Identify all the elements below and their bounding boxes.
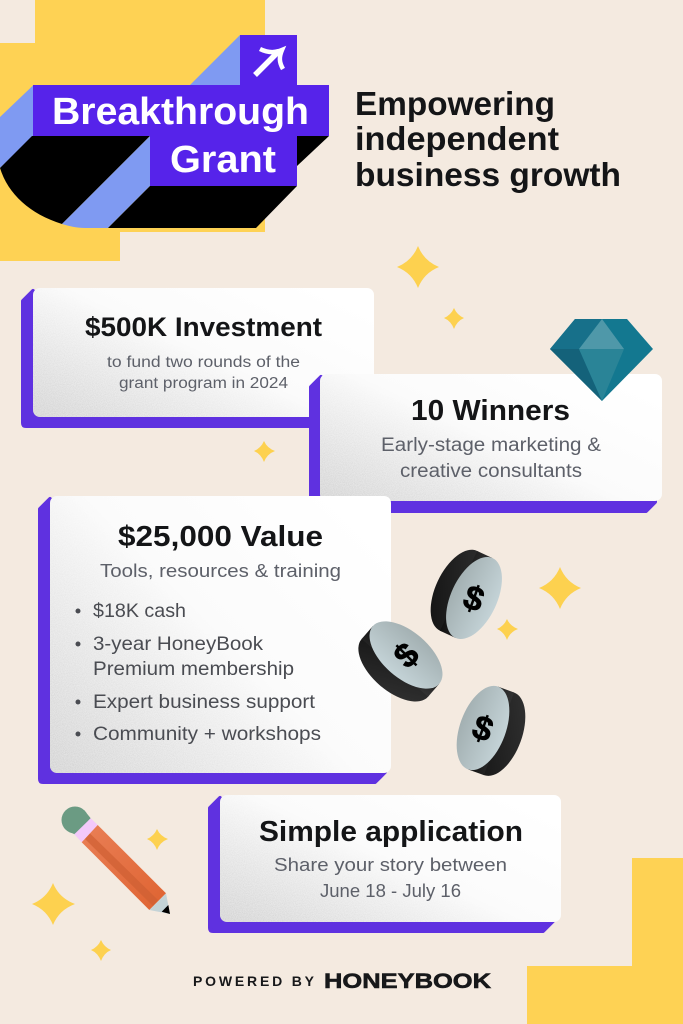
- icon: coin top: $: [458, 578, 489, 620]
- heading: tagline: independent: [355, 120, 559, 157]
- banner title text: Breakthrough: [52, 91, 309, 133]
- text: winners detail: Early-stage marketing &: [381, 435, 601, 456]
- sparkles: [32, 246, 581, 961]
- text: investment detail: grant program in 2024: [119, 375, 288, 392]
- title banner: [0, 35, 329, 228]
- panel: value: [40, 496, 391, 782]
- footer: powered by honeybook: POWERED BY: [193, 973, 315, 989]
- heading: value: $25,000 Value: [118, 521, 323, 553]
- icon: arrow: [255, 49, 283, 75]
- heading: tagline: Empowering: [355, 85, 555, 122]
- panel: application: [210, 795, 561, 931]
- bulleted list: Premium membership: [93, 658, 294, 680]
- panel: investment: [23, 288, 374, 426]
- yellow block: bottom right: [527, 858, 683, 1024]
- heading: application: Simple application: [259, 816, 523, 848]
- footer: powered by honeybook: [193, 969, 492, 993]
- banner title text: [52, 91, 309, 181]
- bulleted list: $18K cash: [93, 600, 186, 622]
- icon: coin bottom: $: [467, 708, 498, 750]
- heading: tagline: [355, 85, 621, 193]
- text: winners detail: [381, 435, 601, 482]
- text: winners detail: creative consultants: [400, 461, 582, 482]
- footer: powered by honeybook: HONEYBOOK: [324, 969, 492, 993]
- text: application detail: [274, 854, 507, 901]
- icon: diamond: [550, 319, 653, 401]
- bulleted list: [76, 600, 321, 745]
- banner title text: Grant: [170, 139, 276, 181]
- text: application detail: June 18 - July 16: [320, 880, 461, 901]
- bulleted list: Expert business support: [93, 691, 316, 713]
- text: application detail: Share your story between: [274, 854, 507, 875]
- icon: pencil: [62, 806, 170, 914]
- text: investment detail: to fund two rounds of the: [107, 354, 300, 371]
- bulleted list: 3-year HoneyBook: [93, 633, 263, 655]
- bulleted list: Community + workshops: [93, 723, 321, 745]
- icon: coin bottom: [446, 679, 536, 783]
- heading: winners: 10 Winners: [411, 395, 570, 427]
- icon: coin left: $: [387, 636, 427, 676]
- text: investment detail: [107, 354, 300, 392]
- text: value subtitle: Tools, resources & training: [100, 560, 341, 581]
- icon: coin left: [347, 609, 454, 714]
- yellow block: top left: [0, 0, 265, 261]
- panel: winners: [311, 374, 662, 511]
- heading: investment: $500K Investment: [85, 312, 322, 342]
- heading: tagline: business growth: [355, 156, 621, 193]
- icon: coin top: [419, 541, 513, 648]
